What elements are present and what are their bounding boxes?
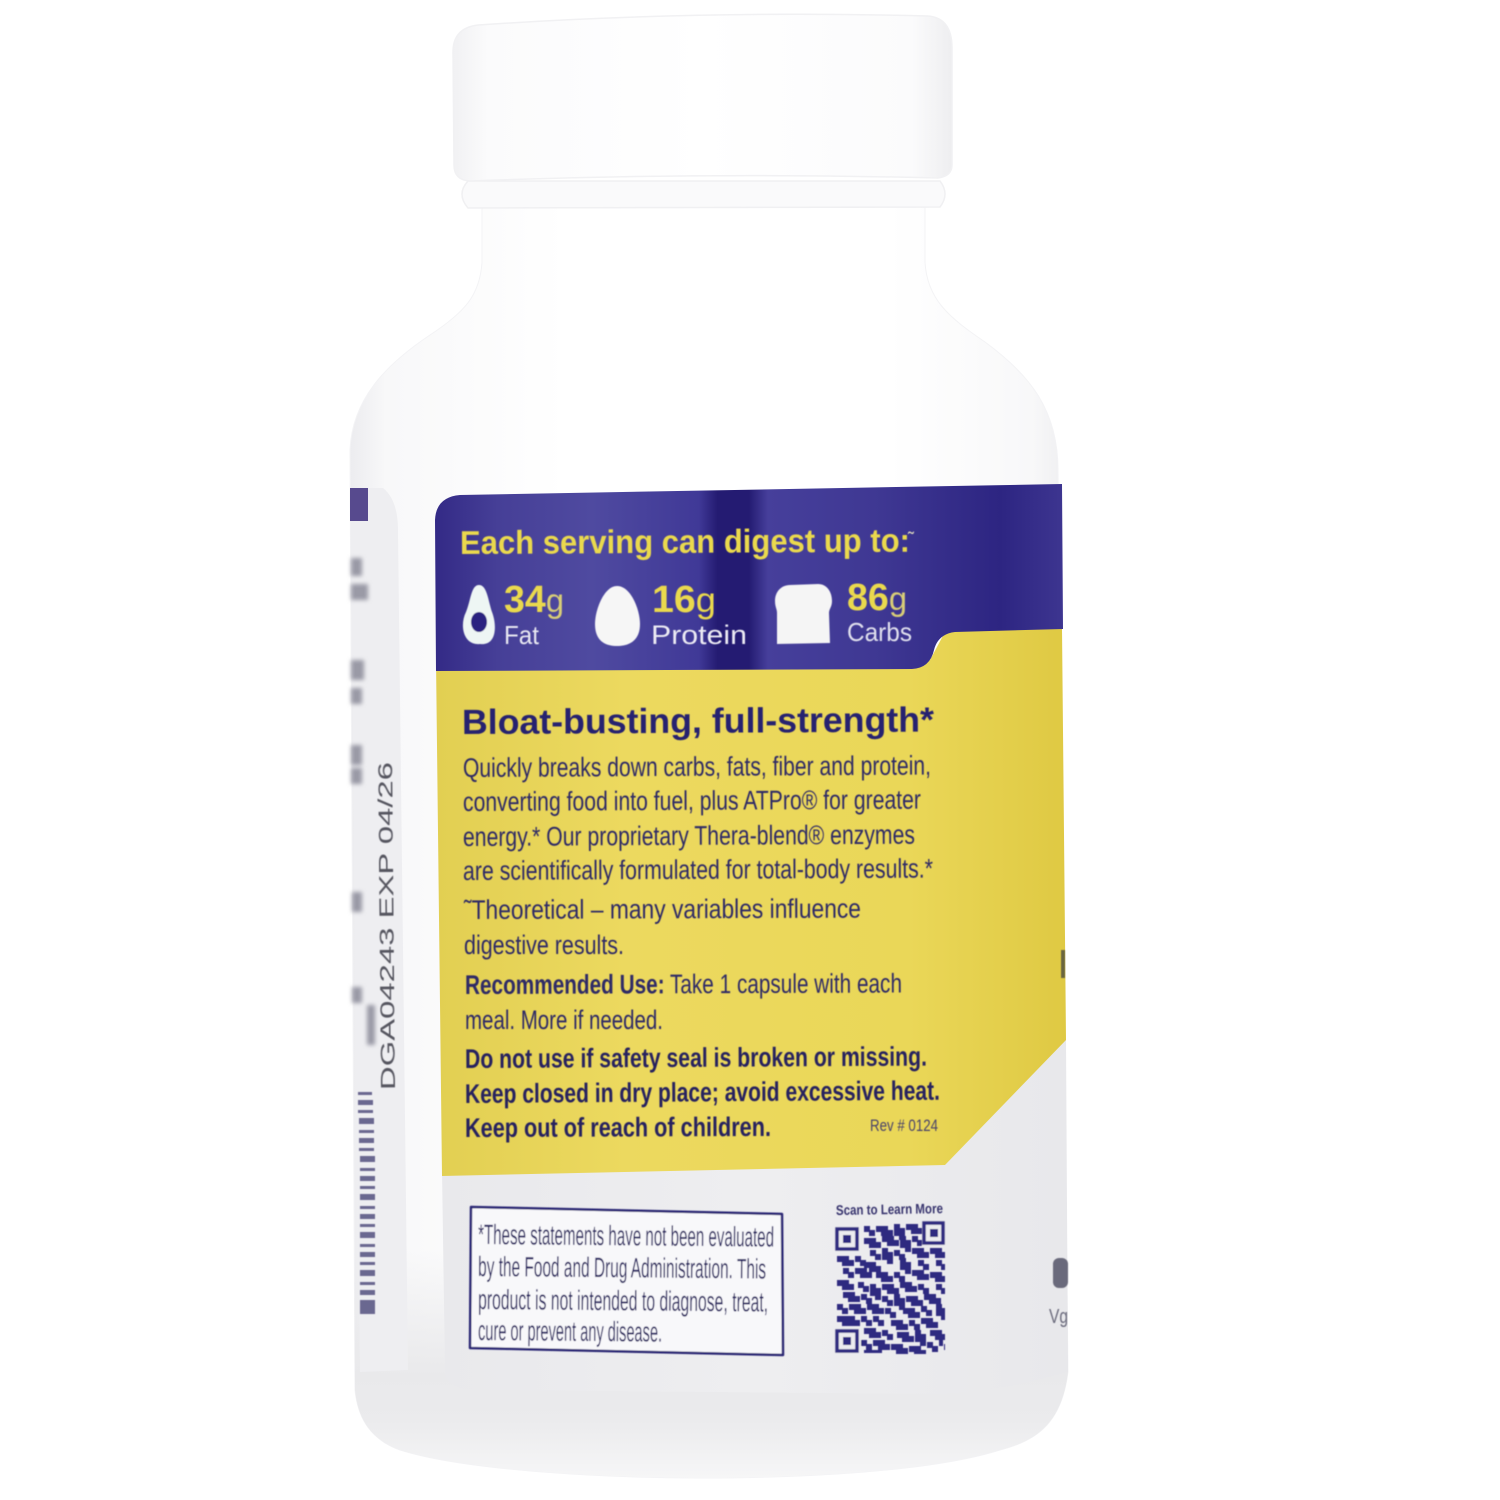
theoretical footnote: ˜Theoretical – many variables influence	[463, 894, 861, 925]
QR code block	[835, 1200, 948, 1357]
bottle cap	[453, 14, 952, 181]
stat: protein	[595, 579, 747, 650]
icon: avocado	[463, 585, 495, 644]
value 86g: 86g	[847, 577, 907, 619]
description paragraph: converting food into fuel, plus ATPro® for greater	[463, 785, 921, 817]
bottle neck ring	[462, 181, 945, 208]
label carbs: Carbs	[847, 617, 912, 647]
product heading: Bloat-busting, full-strength*	[462, 701, 934, 742]
yellow label panel	[436, 628, 1066, 1176]
recommended use: Recommended Use: Take 1 capsule with each	[465, 968, 902, 1000]
description paragraph: are scientifically formulated for total-body results.*	[463, 854, 933, 886]
recommended use	[465, 968, 902, 1035]
warnings	[465, 1042, 940, 1143]
revision number: Rev # 0124	[870, 1116, 938, 1135]
description paragraph	[463, 751, 933, 886]
left side panel of the wrap label	[350, 488, 408, 1372]
QR modules	[837, 1224, 948, 1357]
warnings: Keep closed in dry place; avoid excessive heat.	[465, 1076, 940, 1109]
description paragraph: Quickly breaks down carbs, fats, fiber and protein,	[463, 751, 931, 783]
stat: fat	[463, 579, 564, 650]
FDA disclaimer box	[470, 1207, 783, 1355]
vegan label fragment: Vg	[1049, 1306, 1068, 1328]
icon: egg	[595, 586, 640, 646]
label text group	[460, 522, 940, 1143]
label fat: Fat	[504, 620, 540, 650]
band heading: Each serving can digest up to:	[460, 522, 910, 561]
FDA disclaimer box: product is not intended to diagnose, treat,	[478, 1284, 768, 1318]
bottle base shading	[354, 1250, 1068, 1478]
theoretical footnote	[463, 894, 861, 960]
bottle body	[350, 205, 1068, 1478]
side label tiny text	[351, 558, 375, 1045]
FDA disclaimer box: *These statements have not been evaluated	[478, 1219, 774, 1253]
value 16g: 16g	[652, 579, 716, 621]
label protein: Protein	[651, 620, 747, 650]
FDA disclaimer box: cure or prevent any disease.	[478, 1315, 662, 1348]
white lower label area	[442, 1040, 1068, 1394]
theoretical footnote: digestive results.	[464, 930, 624, 960]
QR finder squares	[835, 1221, 945, 1355]
barcode fragment	[358, 1092, 375, 1314]
stat: carbs	[775, 577, 912, 647]
lot and expiry code: DGA04243 EXP 04/26	[375, 762, 400, 1090]
value 34g: 34g	[504, 579, 564, 621]
FDA disclaimer box: by the Food and Drug Administration. This	[478, 1251, 766, 1285]
right edge yellow panel mark	[1061, 950, 1065, 978]
product photo: supplement bottle, back label	[348, 14, 1069, 1478]
purple label band	[435, 484, 1063, 671]
description paragraph: energy.* Our proprietary Thera-blend® enzymes	[463, 820, 915, 852]
icon: bread slice	[775, 584, 832, 644]
right edge badge	[1049, 1258, 1068, 1328]
purple tab on side label	[350, 488, 368, 521]
warnings: Keep out of reach of children.	[465, 1112, 771, 1143]
heading footnote mark: ˜	[907, 529, 915, 549]
recommended use: meal. More if needed.	[465, 1005, 663, 1035]
warnings: Do not use if safety seal is broken or missing.	[465, 1042, 927, 1074]
QR caption: Scan to Learn More	[836, 1200, 943, 1218]
